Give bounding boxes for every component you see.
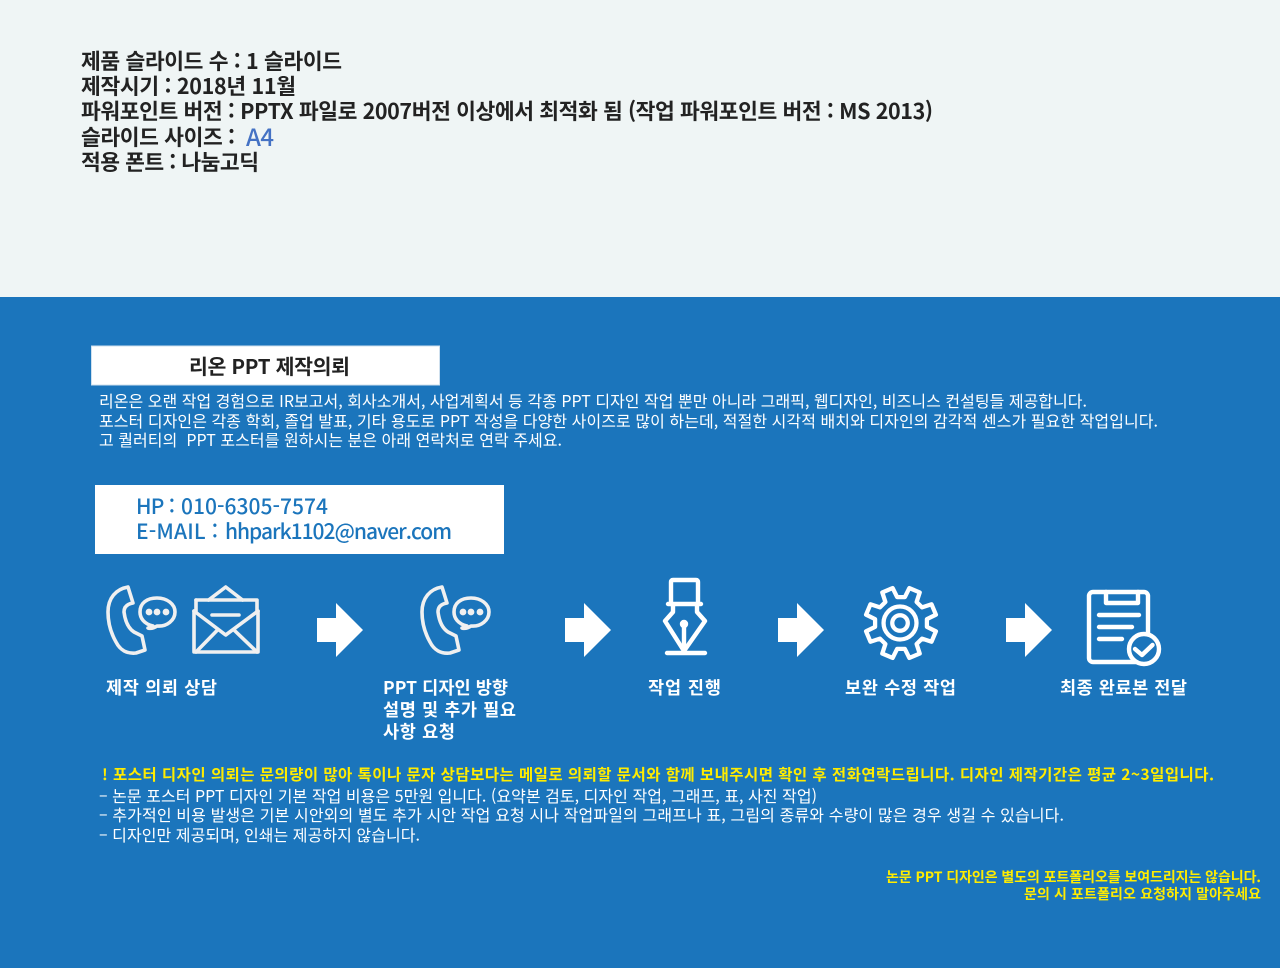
- text: slide count: 제품 슬라이드 수 : 1 슬라이드: [81, 45, 342, 76]
- arrow: step 4 to 5: [1006, 603, 1052, 657]
- panel: request section background: [0, 297, 1280, 968]
- callout: portfolio notice: 문의 시 포트폴리오 요청하지 말아주세요: [1024, 884, 1261, 904]
- label: step 2: PPT 디자인 방향: [383, 675, 508, 700]
- callout: contact box: E-MAIL :: [136, 516, 218, 546]
- label: step 5: 최종 완료본 전달: [1060, 675, 1187, 700]
- text block: pricing notes: – 논문 포스터 PPT 디자인 기본 작업 비용은 5만원 입니다. (요약본 검토, 디자인 작업, 그래프, 표, 사진 작업): [99, 783, 817, 807]
- arrow: step 3 to 4: [778, 603, 824, 657]
- text block: pricing notes: [99, 783, 1064, 846]
- text: slide size value: A4: [246, 118, 274, 153]
- text: production date: 제작시기 : 2018년 11월: [81, 70, 296, 101]
- text: PowerPoint version: 파워포인트 버전 : PPTX 파일로 2007버전 이상에서 최적화 됨 (작업 파워포인트 버전 : MS 2013): [81, 95, 933, 126]
- label: step 2: 설명 및 추가 필요: [383, 697, 516, 722]
- heading: request title box: 리온 PPT 제작의뢰: [189, 350, 350, 380]
- callout: portfolio notice: [886, 867, 1261, 904]
- text block: introduction: 리온은 오랜 작업 경험으로 IR보고서, 회사소개서, 사업계획서 등 각종 PPT 디자인 작업 뿐만 아니라 그래픽, 웹디자인, 비즈니스 컨설팅들 제공합니다.: [99, 388, 1087, 412]
- callout: contact box: [95, 485, 504, 554]
- label: step 2: 사항 요청: [383, 719, 455, 744]
- label: step 1: 제작 의뢰 상담: [106, 675, 217, 700]
- text block: introduction: 고 퀄러티의 PPT 포스터를 원하시는 분은 아래 연락처로 연락 주세요.: [99, 427, 562, 451]
- icon: document with check mark: [1089, 592, 1159, 664]
- text block: pricing notes: – 추가적인 비용 발생은 기본 시안외의 별도 추가 시안 작업 요청 시나 작업파일의 그래프나 표, 그림의 종류와 수량이 많은 경우 생길 수 있습니다.: [99, 802, 1064, 826]
- label: step 2: [383, 675, 516, 744]
- label: step 4: 보완 수정 작업: [845, 675, 956, 700]
- text block: introduction: 포스터 디자인은 각종 학회, 졸업 발표, 기타 용도로 PPT 작성을 다양한 사이즈로 많이 하는데, 적절한 시각적 배치와 디자인의 감각적 센스가 필요한 작업입니다.: [99, 408, 1158, 432]
- arrow: step 1 to 2: [317, 603, 363, 657]
- icon: phone with speech bubble: [108, 587, 175, 653]
- label: step 3: 작업 진행: [648, 675, 721, 700]
- panel: product information: [0, 0, 1280, 297]
- icon: phone with speech bubble, step 2: [422, 587, 489, 653]
- callout: portfolio notice: 논문 PPT 디자인은 별도의 포트폴리오를 보여드리지는 않습니다.: [886, 867, 1261, 887]
- arrow: step 2 to 3: [565, 603, 611, 657]
- text: applied font: 적용 폰트 : 나눔고딕: [81, 146, 259, 177]
- callout: contact box: hhpark1102@naver.com: [225, 516, 452, 546]
- heading: request title box: [92, 346, 440, 385]
- icon: envelope: [194, 587, 258, 652]
- callout: yellow notice: ! 포스터 디자인 의뢰는 문의량이 많아 톡이나 문자 상담보다는 메일로 의뢰할 문서와 함께 보내주시면 확인 후 전화연락드립니다. 디자인 제작기간은 평균 2~3일입니다.: [102, 763, 1214, 785]
- text: slide size label: 슬라이드 사이즈 :: [81, 121, 235, 152]
- text block: introduction: [99, 388, 1158, 451]
- callout: contact box: 010-6305-7574: [181, 491, 328, 521]
- icon: gear: [866, 588, 936, 658]
- callout: contact box: HP :: [136, 491, 175, 521]
- text block: pricing notes: – 디자인만 제공되며, 인쇄는 제공하지 않습니다.: [99, 822, 420, 846]
- icon: fountain pen: [665, 580, 705, 653]
